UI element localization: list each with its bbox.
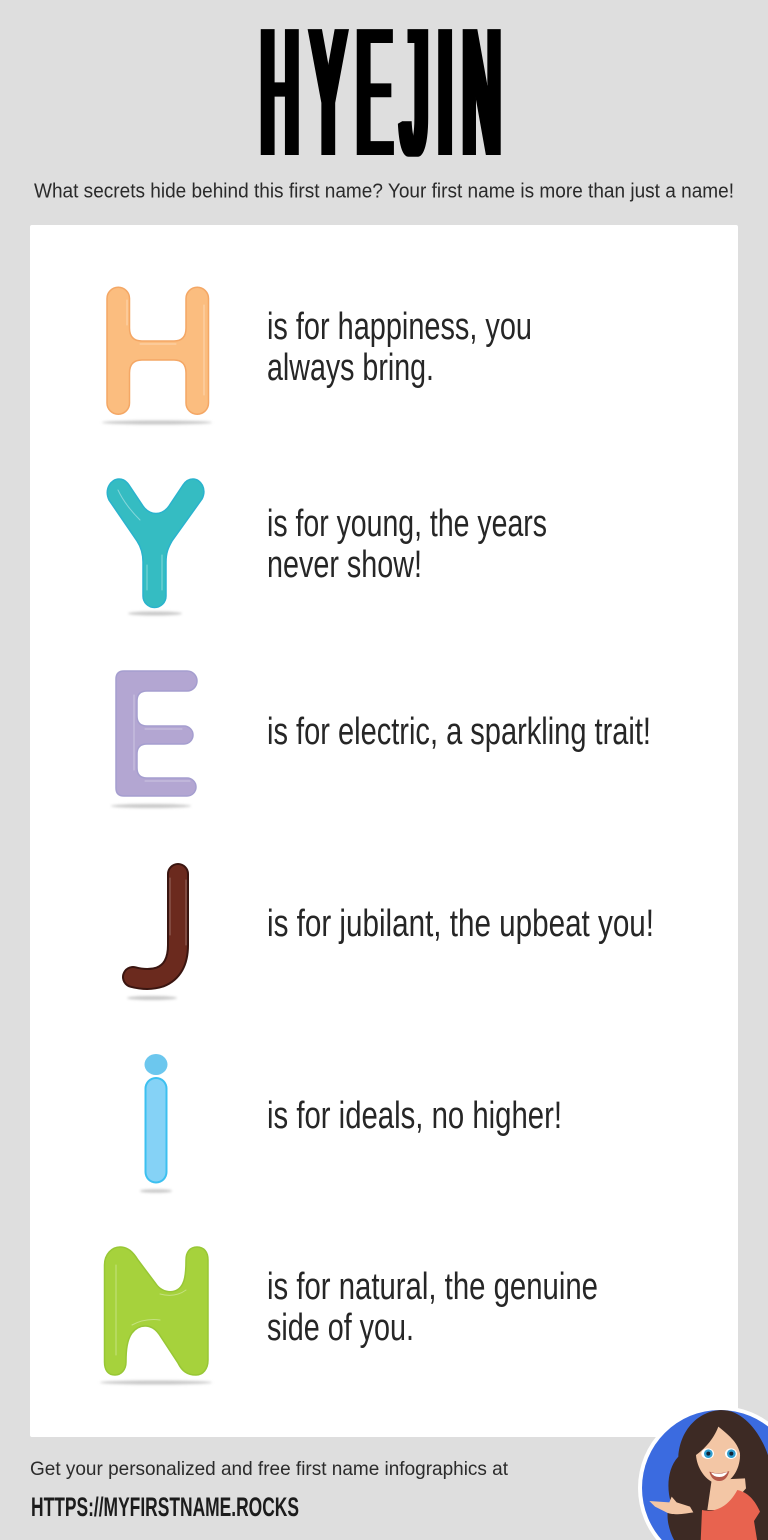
text: N: is for natural, the genuine: [267, 1266, 598, 1308]
icon: letter N: [100, 1247, 212, 1384]
icon: letter i: [140, 1054, 172, 1193]
text: H: [267, 306, 532, 389]
icon: letter E: [111, 671, 197, 808]
text: Y: never show!: [267, 544, 422, 586]
icon: letter J: [127, 874, 186, 1000]
text: N: side of you.: [267, 1307, 414, 1349]
footer text: Get your personalized and free first name infographics at: [30, 1458, 509, 1480]
text: H: always bring.: [267, 347, 434, 389]
icon: letter H: [102, 287, 212, 424]
subtitle: What secrets hide behind this first name? Your first name is more than just a name!: [34, 180, 734, 202]
text: Y: [267, 503, 547, 586]
text: Y: is for young, the years: [267, 503, 547, 545]
text: N: [267, 1266, 598, 1349]
text: i: is for ideals, no higher!: [267, 1095, 562, 1137]
text: J: is for jubilant, the upbeat you!: [267, 903, 654, 945]
avatar: [638, 1406, 768, 1540]
icon: letter Y: [107, 479, 204, 616]
footer url: HTTPS://MYFIRSTNAME.ROCKS: [31, 1492, 299, 1522]
text: H: is for happiness, you: [267, 306, 532, 348]
panel: letter list: [30, 225, 738, 1437]
text: E: is for electric, a sparkling trait!: [267, 711, 651, 753]
